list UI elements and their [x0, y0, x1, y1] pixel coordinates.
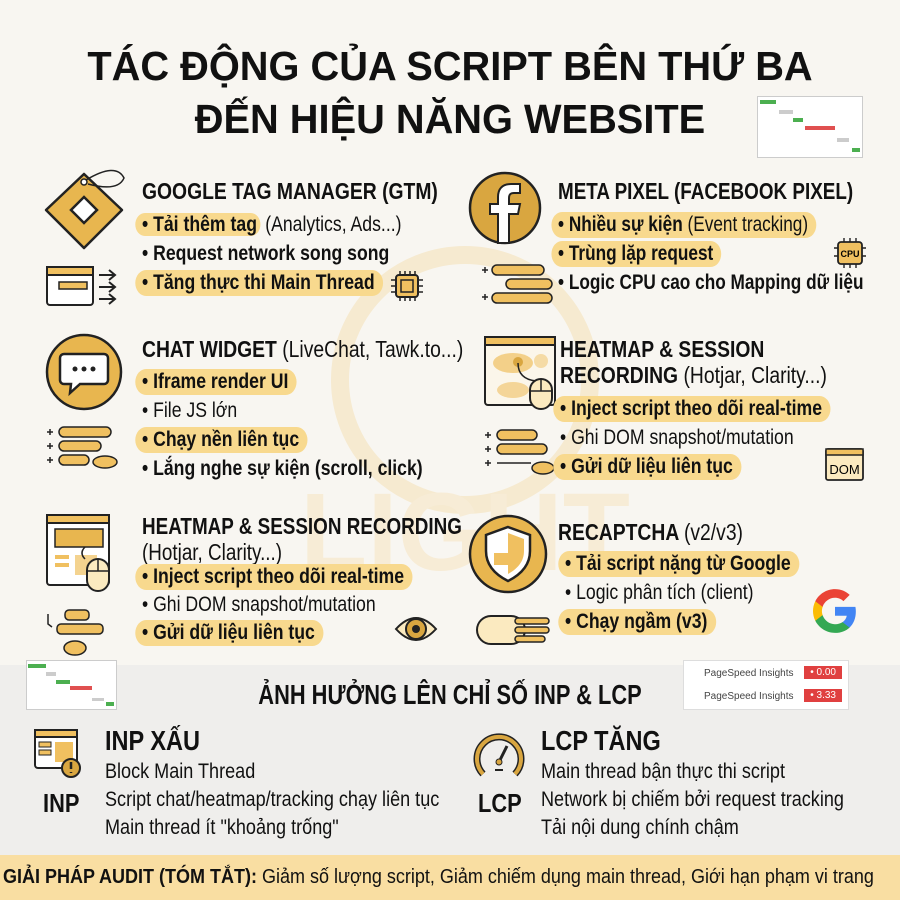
bullets: • Tăng thực thi Main Thread — [142, 271, 375, 294]
panel: INP — [34, 725, 439, 839]
bullets — [551, 212, 864, 294]
heading: (Hotjar, Clarity...) — [142, 539, 282, 565]
bullets: • Inject script theo dõi real-time — [142, 565, 404, 588]
PageSpeed badges: • 3.33 — [810, 690, 836, 701]
text lines: Main thread ít "khoảng trống" — [105, 816, 339, 839]
icon: list — [482, 264, 553, 304]
icon: GTM tag — [44, 170, 125, 250]
panel: Heatmap left — [46, 513, 462, 656]
text lines — [105, 760, 439, 839]
icon: CPU — [834, 238, 866, 268]
title: TÁC ĐỘNG CỦA SCRIPT BÊN THỨ BA — [87, 43, 813, 89]
bullets: • Gửi dữ liệu liên tục — [560, 455, 733, 478]
bullets: • Gửi dữ liệu liên tục — [142, 621, 315, 644]
bullets — [135, 213, 402, 296]
icon: chat bubble — [46, 334, 122, 410]
PageSpeed badges: PageSpeed Insights — [704, 668, 794, 679]
heading: HEATMAP & SESSION RECORDING — [142, 513, 462, 539]
icon: shield — [468, 514, 548, 594]
bullets: • Inject script theo dõi real-time — [560, 397, 822, 420]
heading: CHAT WIDGET (LiveChat, Tawk.to...) — [142, 336, 463, 362]
heading: META PIXEL (FACEBOOK PIXEL) — [558, 178, 853, 204]
bullets: • Tải script nặng từ Google — [565, 552, 791, 575]
icon: gauge — [473, 728, 525, 780]
bullets: • Trùng lặp request — [558, 242, 713, 265]
bullets — [135, 369, 423, 480]
icon: list — [485, 429, 554, 475]
panel: Heatmap right — [484, 336, 864, 481]
label LCP: LCP — [478, 788, 522, 818]
title: ĐẾN HIỆU NĂNG WEBSITE — [195, 96, 705, 142]
heading — [560, 336, 827, 388]
bullets: • Ghi DOM snapshot/mutation — [142, 593, 376, 616]
chart thumbnail bottom — [26, 660, 117, 710]
text lines: Block Main Thread — [105, 760, 255, 783]
PageSpeed badges: PageSpeed Insights — [704, 691, 794, 702]
icon: DOM — [825, 448, 864, 481]
icon: facebook — [468, 172, 542, 244]
chart thumbnail top — [757, 96, 863, 158]
heading: INP XẤU — [105, 725, 200, 756]
panel: reCAPTCHA — [468, 514, 856, 645]
heading — [142, 513, 462, 565]
text lines: Network bị chiếm bởi request tracking — [541, 788, 844, 811]
icon: browser mouse — [46, 514, 110, 592]
icon: list — [47, 609, 104, 656]
title — [87, 43, 813, 142]
bullets: • Iframe render UI — [142, 370, 288, 393]
icon: chip — [391, 271, 423, 301]
PageSpeed badges: • 0.00 — [810, 667, 836, 678]
icon: DOM: DOM — [829, 462, 860, 477]
text lines: Script chat/heatmap/tracking chạy liên tục — [105, 788, 439, 811]
bullets — [135, 564, 412, 646]
panel: LCP — [470, 725, 890, 840]
bullets: • Nhiều sự kiện (Event tracking) — [558, 213, 808, 236]
panel: Meta Pixel — [468, 172, 866, 304]
bullets: • File JS lớn — [142, 399, 237, 422]
panel: GTM — [44, 170, 438, 306]
bullets: • Tải thêm tag (Analytics, Ads...) — [142, 213, 402, 236]
icon: Google G — [813, 589, 856, 633]
PageSpeed badges — [683, 660, 849, 710]
heading: GOOGLE TAG MANAGER (GTM) — [142, 178, 438, 204]
bullets: • Ghi DOM snapshot/mutation — [560, 426, 794, 449]
bullets: • Chạy ngầm (v3) — [565, 610, 707, 633]
icon: heatmap browser — [484, 336, 556, 410]
bottom gray section — [0, 665, 900, 855]
bullets — [553, 396, 830, 480]
bullets — [558, 551, 800, 635]
watermark — [300, 246, 630, 594]
icon: hand list — [476, 615, 550, 645]
icon: browser arrows — [46, 266, 116, 306]
icon: eye — [394, 617, 438, 641]
footer text: GIẢI PHÁP AUDIT (TÓM TẮT): Giảm số lượng script, Giảm chiếm dụng main thread, Giới hạn phạm vi trang — [3, 866, 874, 888]
panel: Chat widget — [46, 334, 463, 480]
label INP: INP — [43, 788, 79, 818]
bullets: • Logic phân tích (client) — [565, 581, 754, 604]
footer bar — [0, 855, 900, 900]
heading: LCP TĂNG — [541, 725, 661, 756]
text lines: Tải nội dung chính chậm — [541, 816, 739, 839]
heading: HEATMAP & SESSION — [560, 336, 764, 362]
bullets: • Logic CPU cao cho Mapping dữ liệu — [558, 271, 864, 294]
icon: CPU: CPU — [840, 249, 860, 259]
bullets: • Chạy nền liên tục — [142, 428, 299, 451]
text lines — [541, 758, 844, 842]
watermark: LIGHT — [300, 471, 630, 594]
heading: RECORDING (Hotjar, Clarity...) — [560, 362, 827, 388]
bullets: • Request network song song — [142, 242, 389, 265]
icon: list stack — [47, 426, 118, 469]
text lines: Main thread bận thực thi script — [541, 760, 785, 783]
section heading: ẢNH HƯỞNG LÊN CHỈ SỐ INP & LCP — [258, 679, 642, 710]
bullets: • Lắng nghe sự kiện (scroll, click) — [142, 457, 423, 480]
icon: INP — [34, 729, 81, 778]
heading: RECAPTCHA (v2/v3) — [558, 519, 743, 545]
